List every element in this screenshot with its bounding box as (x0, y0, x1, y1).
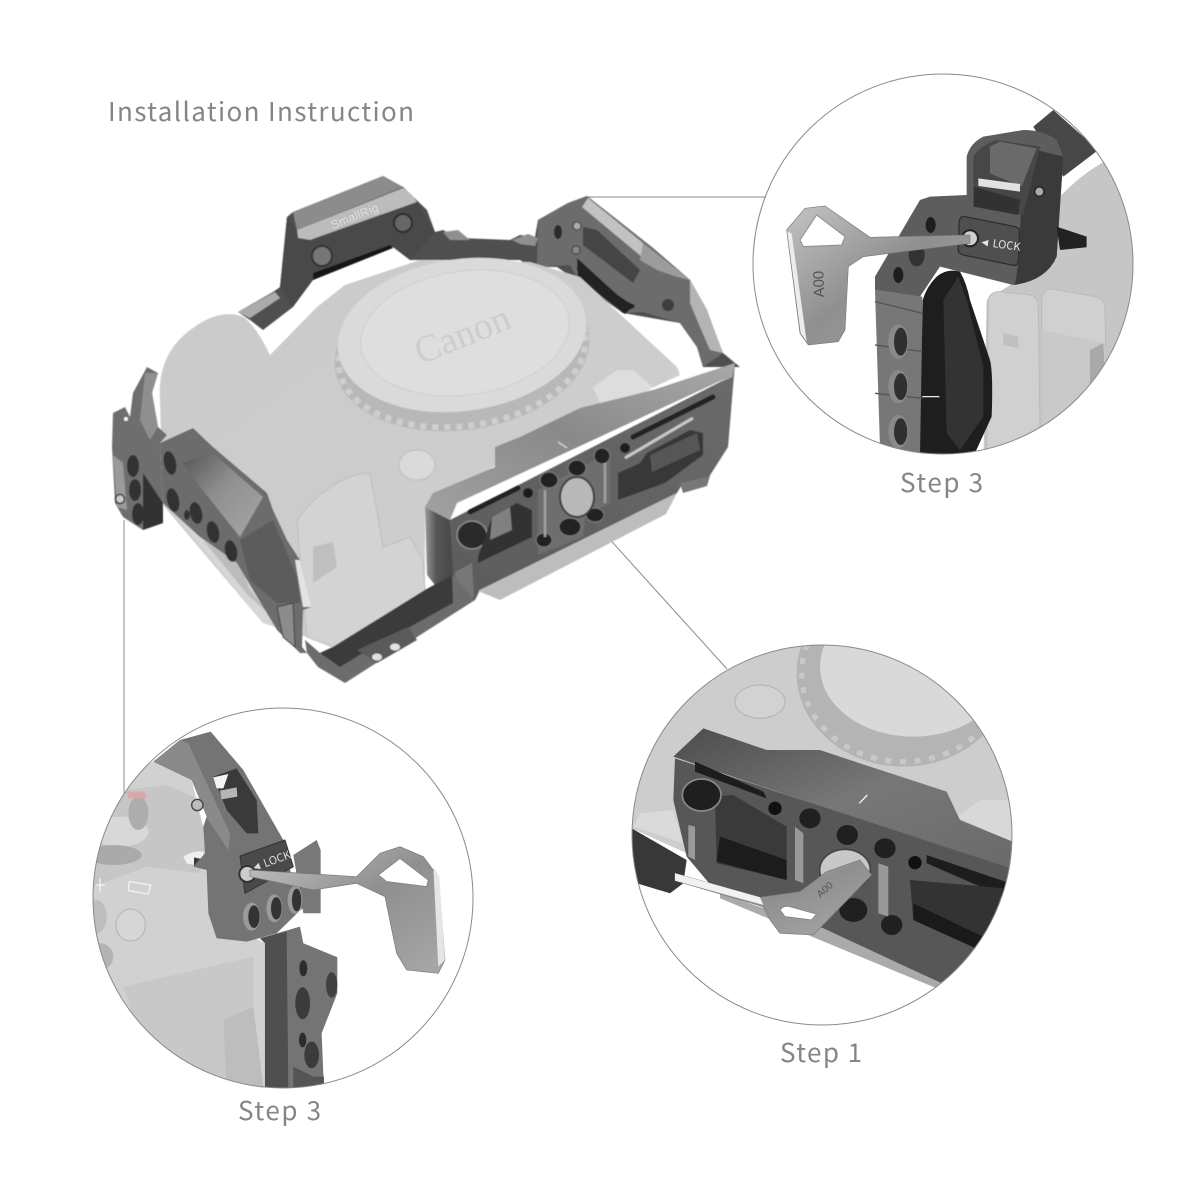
infographic canvas (92, 74, 1134, 1126)
lock body (153, 732, 304, 942)
right tab (293, 840, 321, 913)
cage bottom plate (425, 363, 735, 605)
cage rear frame (238, 176, 740, 367)
circle outline (632, 645, 1012, 1025)
camera background (632, 646, 1012, 853)
key (787, 206, 970, 345)
body cap (324, 242, 600, 447)
camera background (984, 162, 1132, 450)
lower arm (260, 927, 337, 1090)
main product: camera in cage (112, 176, 740, 683)
lock body (875, 130, 1087, 297)
lower arm (875, 271, 992, 457)
lock label: ◄ LOCK (249, 846, 294, 876)
key label: A00 (810, 270, 828, 298)
camera body (160, 260, 680, 647)
lock plate (958, 217, 1020, 265)
camera background (94, 762, 265, 1086)
key (250, 847, 445, 973)
key label: A00 (815, 880, 836, 900)
caption: step 3 bottom: Step 3 (238, 1091, 321, 1128)
cage side panel (156, 428, 312, 653)
cage lower frame (305, 575, 475, 683)
connector lines (124, 197, 766, 794)
title: Installation Instruction (108, 92, 414, 129)
caption: step 1: Step 1 (780, 1033, 862, 1070)
caption: step 3 top: Step 3 (900, 463, 983, 500)
key (675, 860, 872, 935)
detail circle: top right (753, 74, 1143, 467)
body cap logo: Canon (408, 297, 517, 373)
cage left bracket (112, 367, 167, 530)
arm (1033, 110, 1098, 177)
detail circle: bottom left (80, 708, 473, 1100)
circle outline (93, 708, 473, 1088)
plate (673, 728, 1017, 988)
lock label: ◄ LOCK (978, 233, 1022, 255)
cage logo: SmallRig (329, 200, 380, 232)
circle outline (753, 74, 1133, 454)
detail circle: bottom right (632, 644, 1012, 1026)
left arm (627, 828, 687, 893)
